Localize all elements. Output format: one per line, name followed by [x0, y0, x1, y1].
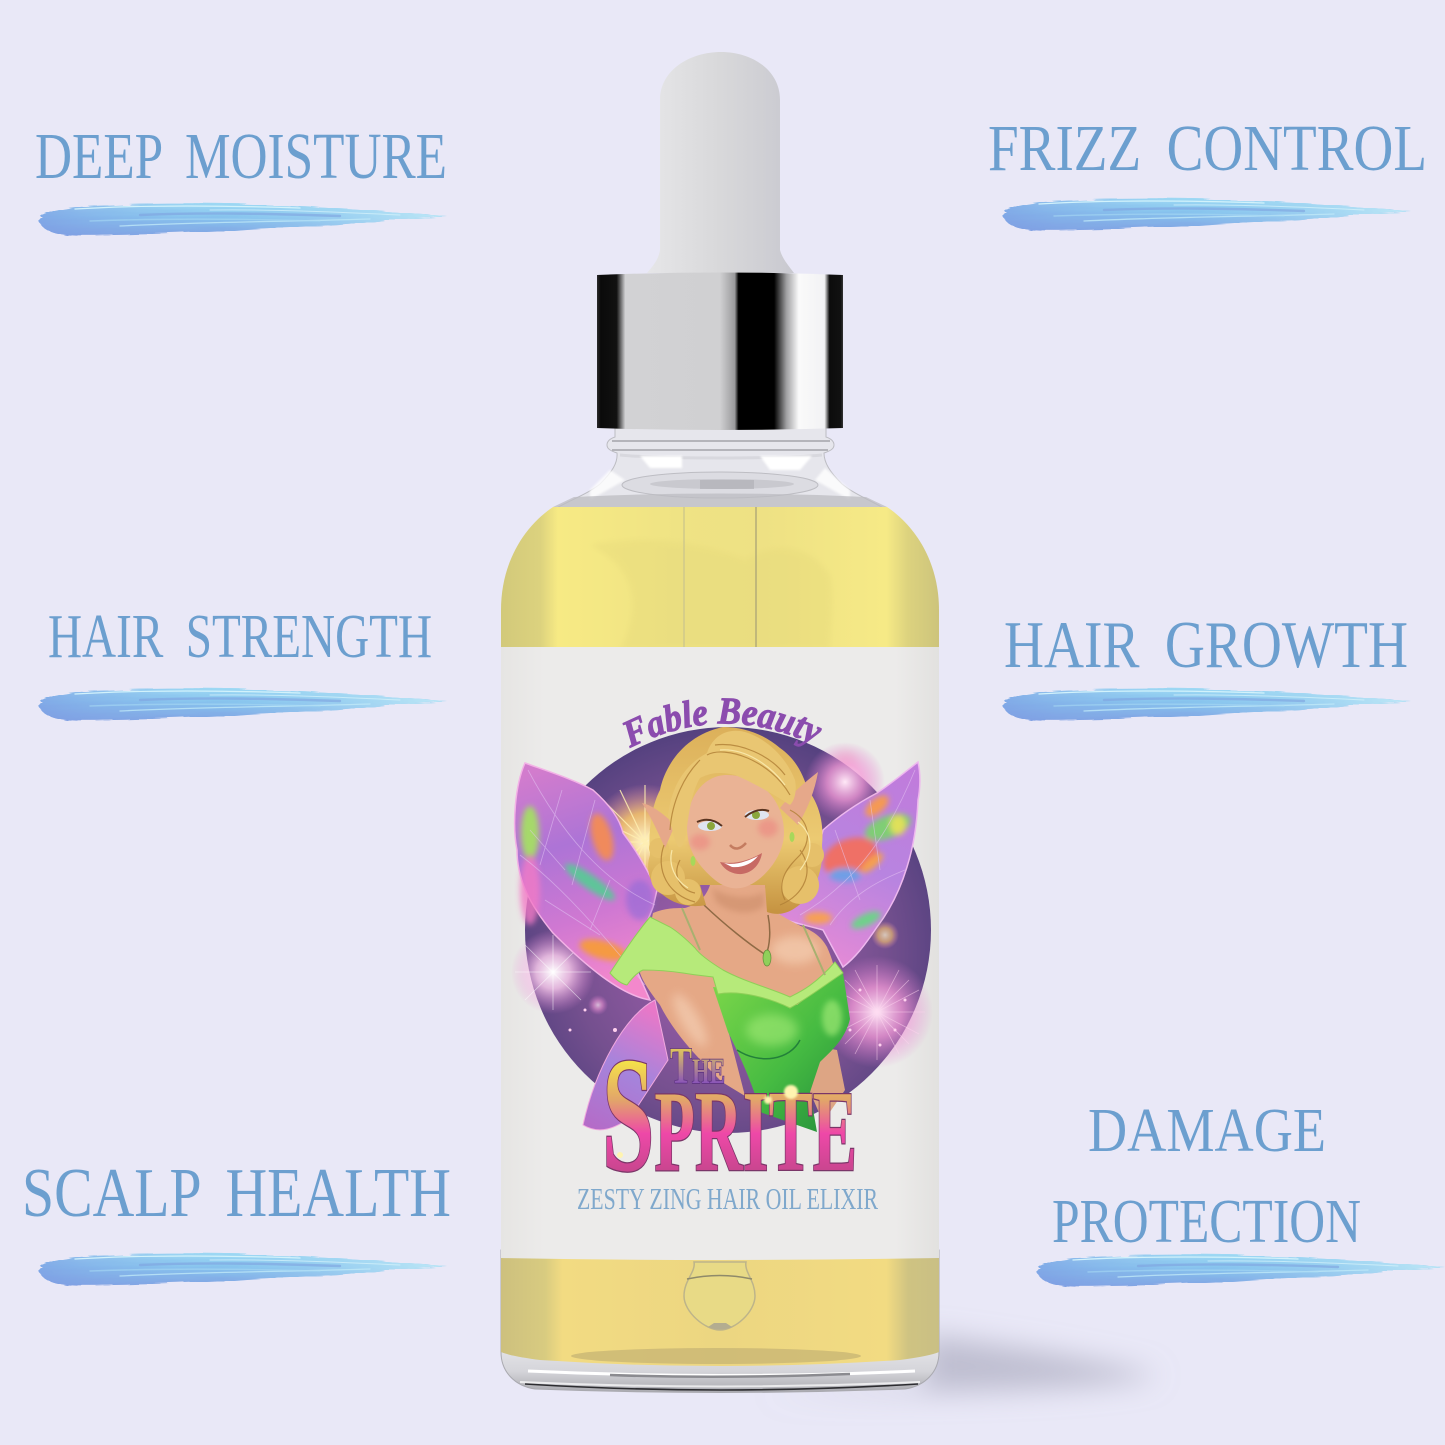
oil lower and glass base [501, 1250, 939, 1392]
heading: frizz control [988, 112, 1427, 230]
heading: deep moisture [35, 120, 447, 235]
hair back [648, 727, 822, 914]
text: sprite: Sprite [602, 1023, 857, 1206]
earrings [690, 832, 794, 866]
circle backdrop [525, 727, 931, 1133]
neck shadow [712, 888, 764, 912]
bottle shadow [760, 1335, 1160, 1395]
mouth [720, 853, 762, 874]
right wing [777, 762, 920, 967]
bodice highlights [737, 1000, 842, 1059]
glass neck and shoulder [553, 428, 887, 510]
eyes [697, 810, 769, 831]
text: the: The [670, 1038, 725, 1095]
oil upper [501, 507, 939, 650]
shoulder straps [682, 908, 825, 975]
cheeks [690, 819, 778, 850]
bottle label [501, 647, 939, 1260]
nose [730, 843, 746, 849]
heading: damage protection: DAMAGE [1088, 1097, 1326, 1165]
green bodice [713, 973, 850, 1132]
metal collar [597, 272, 843, 430]
product bottle [501, 52, 939, 1392]
hair curls [661, 745, 807, 905]
oil pool reflection [571, 1348, 861, 1364]
shoulder grey band [553, 494, 887, 507]
heading: hair strength: HAIR STRENGTH [48, 603, 432, 671]
skin: chest and arms [640, 885, 835, 1096]
right wing patterns [804, 792, 914, 932]
ears [642, 772, 818, 848]
hair front [668, 731, 796, 847]
right arm [810, 1047, 845, 1122]
heading: deep moisture: DEEP MOISTURE [35, 120, 447, 193]
necklace [704, 905, 771, 966]
right wing veins [800, 770, 915, 925]
left wing patterns [520, 770, 655, 985]
label art: the fairy [514, 698, 931, 1216]
chest highlights [667, 936, 819, 1050]
label art: the fairy: Fable Beauty [622, 698, 822, 748]
fireworks [511, 742, 933, 1068]
heading: hair growth [1003, 608, 1411, 720]
glass base reflections [520, 1371, 920, 1390]
left lower wing [583, 1000, 668, 1130]
heading: damage protection [1037, 1097, 1445, 1286]
sparkles [617, 1085, 798, 1158]
hair curls lumps [649, 838, 824, 905]
heading: damage protection: PROTECTION [1052, 1188, 1361, 1256]
neck rim detail [612, 441, 830, 458]
heading: scalp health: SCALP HEALTH [22, 1155, 451, 1232]
tube and highlights [684, 507, 756, 647]
oil refraction shadow [590, 540, 832, 650]
shoulder highlights [590, 456, 850, 500]
left upper wing [515, 763, 657, 1000]
pink smudge [833, 752, 857, 772]
heading: scalp health [22, 1155, 451, 1285]
text: product name: ZESTY ZING HAIR OIL ELIXIR [577, 1181, 878, 1216]
inner glass ring [622, 472, 818, 498]
heading: hair strength [39, 603, 447, 720]
icon: dropper bulb [647, 52, 794, 273]
icon: dropper tip [684, 1262, 755, 1330]
text: fable beauty [630, 723, 817, 748]
sleeve ruffle [610, 917, 843, 1008]
face [687, 775, 784, 888]
